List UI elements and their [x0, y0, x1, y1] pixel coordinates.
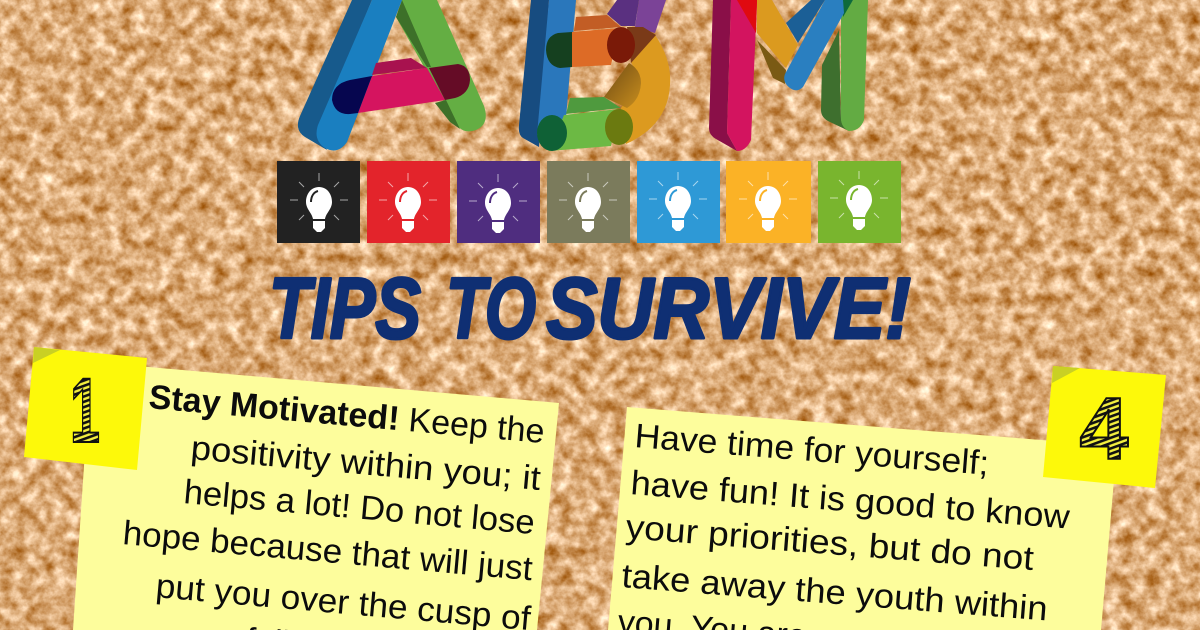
tip 1 text: [121, 378, 546, 630]
number note 1: 1: [70, 360, 100, 462]
title: TIPS: [269, 261, 421, 357]
icon: amber bulb square: [726, 161, 811, 243]
panel: tip 4 sticky note: [608, 366, 1166, 630]
tip 4 text: your priorities, but do not: [624, 508, 1036, 578]
title: [269, 261, 911, 357]
letter M: [709, 0, 868, 151]
icon row: seven light bulb squares: [277, 161, 901, 243]
tip 1 text: Stay Motivated! Keep the: [147, 378, 546, 451]
number note 1: [24, 347, 147, 470]
tip 1 text: helps a lot! Do not lose: [182, 473, 536, 542]
number note 4: 4: [1080, 379, 1129, 478]
tip 1 text: hope because that will just: [121, 514, 535, 588]
tip 4 text: have fun! It is good to know: [629, 464, 1071, 537]
icon: red bulb square: [367, 161, 450, 243]
panel: tip 1 sticky note: [24, 347, 559, 630]
icon: green bulb square: [818, 161, 901, 243]
icon: black bulb square: [277, 161, 360, 243]
logo: ABM letters: [298, 0, 868, 151]
tip 1 text: positivity within you; it: [189, 429, 543, 498]
title: TO: [446, 261, 536, 357]
icon: olive bulb square: [547, 161, 630, 243]
icon: blue bulb square: [637, 161, 720, 243]
tip 4 text: take away the youth within: [620, 557, 1049, 628]
icon: purple bulb square: [457, 161, 540, 243]
letter B: [519, 0, 670, 151]
number note 4: [1043, 366, 1166, 488]
tip 4 text: Have time for yourself;: [633, 417, 990, 483]
title: SURVIVE!: [546, 261, 911, 357]
letter A: [298, 0, 486, 150]
tip 4 text: [616, 417, 1071, 630]
